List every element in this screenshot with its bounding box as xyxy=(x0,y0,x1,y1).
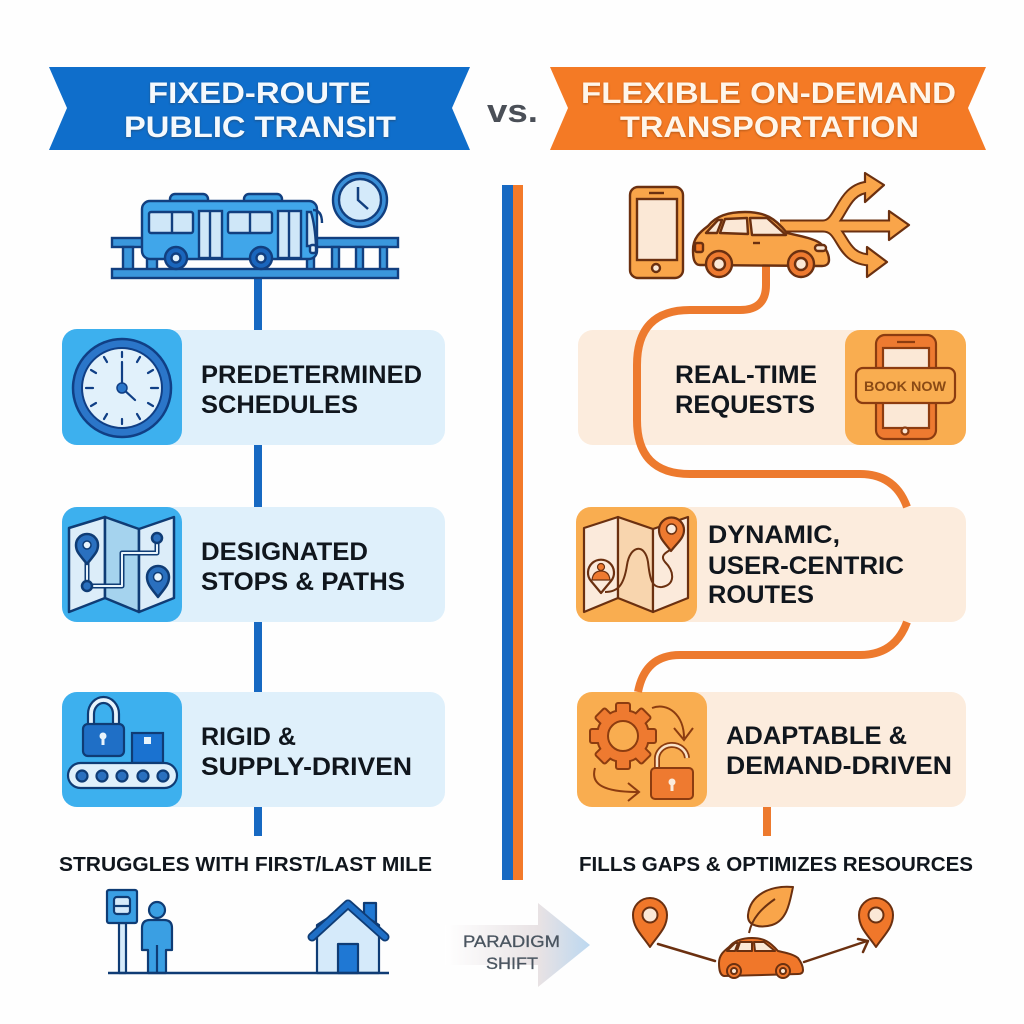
icon: phone, car and branching arrows xyxy=(630,173,909,278)
left title banner: PUBLIC TRANSIT xyxy=(124,111,396,144)
icon: map with winding route xyxy=(584,517,688,612)
icon: phone with book now button xyxy=(856,335,955,439)
smartphone xyxy=(630,187,683,278)
left connector line xyxy=(254,278,262,836)
left footer caption: STRUGGLES WITH FIRST/LAST MILE xyxy=(59,854,432,876)
right pin xyxy=(859,898,893,947)
right title banner: FLEXIBLE ON-DEMAND xyxy=(581,77,956,110)
small car xyxy=(719,938,803,978)
arrow: paradigm shift xyxy=(445,903,590,987)
label: RIGID & xyxy=(201,723,296,751)
label: REQUESTS xyxy=(675,391,815,419)
panel: designated stops and paths xyxy=(62,507,445,622)
label xyxy=(708,521,904,609)
label: DESIGNATED xyxy=(201,538,368,566)
label xyxy=(675,361,817,419)
branching arrows xyxy=(780,173,909,277)
icon: phone with book now button: BOOK NOW xyxy=(864,378,947,394)
label: ROUTES xyxy=(708,581,814,609)
icon: gear, arrows and open lock xyxy=(590,703,693,801)
left title banner: FIXED-ROUTE xyxy=(148,77,371,110)
arrow: paradigm shift: PARADIGM xyxy=(463,932,560,951)
label: DEMAND-DRIVEN xyxy=(726,752,952,780)
panel: rigid and supply-driven xyxy=(62,692,445,807)
icon: bus with clock xyxy=(112,173,398,278)
label: SCHEDULES xyxy=(201,391,358,419)
winding orange route xyxy=(637,265,907,836)
panel: dynamic user-centric routes xyxy=(576,507,966,622)
versus label: vs. xyxy=(487,93,538,129)
route arrows xyxy=(658,939,868,962)
label: ADAPTABLE & xyxy=(726,722,907,750)
icon: pins, car and leaf xyxy=(633,887,893,978)
icon: bus stop, person and house xyxy=(107,890,389,973)
left pin xyxy=(633,898,667,947)
label: STOPS & PATHS xyxy=(201,568,405,596)
label: USER-CENTRIC xyxy=(708,552,904,580)
label: REAL-TIME xyxy=(675,361,817,389)
right title banner: TRANSPORTATION xyxy=(620,111,919,144)
right title banner xyxy=(550,67,986,150)
right footer caption: FILLS GAPS & OPTIMIZES RESOURCES xyxy=(579,854,973,876)
center divider xyxy=(502,185,523,880)
car xyxy=(693,212,829,277)
label: SUPPLY-DRIVEN xyxy=(201,753,412,781)
label xyxy=(201,723,412,781)
panel: adaptable and demand-driven xyxy=(577,692,966,807)
icon: wall clock xyxy=(73,339,171,437)
icon: folded map with route xyxy=(69,517,174,612)
leaf xyxy=(748,887,793,933)
label xyxy=(201,538,405,596)
label: DYNAMIC, xyxy=(708,521,840,549)
left title banner xyxy=(49,67,470,150)
label xyxy=(726,722,952,780)
arrow: paradigm shift: SHIFT xyxy=(486,954,538,973)
panel: predetermined schedules xyxy=(62,329,445,445)
label xyxy=(201,361,422,419)
label: PREDETERMINED xyxy=(201,361,422,389)
icon: lock and conveyor xyxy=(68,697,177,788)
panel: real-time requests xyxy=(578,330,966,445)
